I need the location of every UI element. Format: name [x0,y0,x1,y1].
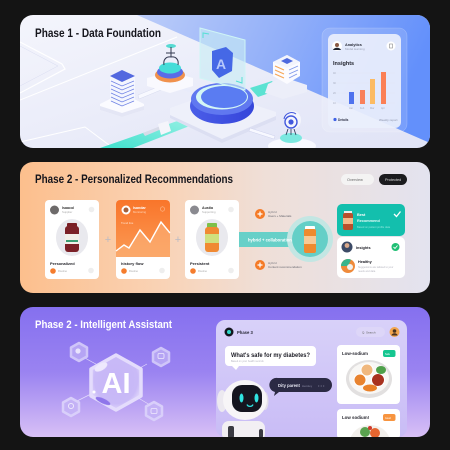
document block on platform [265,55,307,94]
satellite hexagon top left [71,343,87,361]
panel: phase 2 intelligent assistant [20,307,430,450]
card: history line chart: Isandar [133,206,146,210]
orange plus callout top: Hybrid [268,210,277,214]
assistant app window [216,320,407,450]
teal result card: Best [357,213,366,217]
bottom connector [249,128,275,139]
holographic screen with A cube [200,28,245,90]
connector: arm to hub [180,86,195,94]
robot assistant [217,380,268,441]
assistant dark bubble: Hensley [302,384,313,388]
food card low sodium [337,345,400,404]
plus sign: + [105,234,111,246]
search pill [356,327,385,337]
food card low sodium second: Low sodium! [342,415,370,420]
card: history line chart: Monitoring [133,210,147,214]
heading: phase 2 recommendations: Phase 2 - Personalized Recommendations [35,174,233,186]
card: personalised bottle: Supplier [62,210,72,214]
chart legend [333,118,398,122]
satellite hexagon bottom right [146,402,162,420]
connector: server to arm [138,88,161,99]
clipboard button [386,42,396,50]
teal result card: Based on patient profile data [357,225,391,229]
orange plus callout top: Users + Materials [268,214,292,218]
satellite hexagon top right [153,348,169,366]
food card low sodium: Safe [385,353,391,356]
panel: phase 2 personalized recommendations [20,162,430,293]
white result card: Insights [356,246,371,250]
food card low sodium: Low-sodium [342,351,368,356]
card: personalised bottle [45,200,99,279]
spiral icon on teal pedestal [268,111,316,148]
teal result card: Recommend [357,219,380,223]
orange plus callout bottom: Content recommendation [268,265,302,269]
white result card: Suggestions are tailored to your [358,266,393,269]
status pills [341,174,407,185]
bar chart [333,72,386,110]
assistant dark bubble: Dity parent [278,383,300,388]
teal result card [337,204,405,236]
app logo and name: Phase 3 [237,330,254,335]
teal hybrid band with bottle: hybrid + collaboration [248,238,292,242]
user chat bubble: Based on your health records [231,360,264,363]
bar chart: 40 [333,72,336,75]
satellite hexagon bottom left [63,398,79,416]
dashboard header text [345,44,364,50]
food card low sodium second [337,409,400,450]
teal link to document block [250,81,272,97]
food card low sodium second: Good [385,417,392,420]
dashboard header text: Model learning [345,47,365,51]
card: orange bottle: Austia [202,206,214,210]
dashboard title: Insights [333,61,354,67]
user avatar [390,327,400,337]
white result card [337,237,405,278]
search pill: Q. Search [362,330,376,334]
heading: intelligent assistant: Phase 2 - Intelligent Assistant [35,319,172,331]
teal pipe [100,121,188,148]
dashboard glass card [322,28,407,132]
AI hub network [63,343,169,420]
orange plus callout bottom [255,260,302,270]
card: orange bottle [185,200,239,279]
avatar [332,41,342,51]
holographic screen with A cube: A [216,56,226,72]
AI hexagon: AI [102,368,130,400]
user chat bubble: What's safe for my diabetes? [231,352,310,359]
card: history line chart [116,200,170,279]
card: personalised bottle: Personalized [50,261,75,266]
panel: phase 1 data foundation [20,15,430,154]
dashboard header text: Analytics [345,43,362,47]
bar chart: 30 [333,82,336,85]
card: orange bottle: Persistent [190,261,210,266]
card: history line chart: Routine [129,269,138,273]
status pills: Protected [385,178,401,182]
bar chart: Mar [370,107,374,110]
server stack on platform [100,70,144,117]
card: orange bottle: Supporting [202,210,216,214]
card: history line chart: Trend line [121,221,134,225]
bar chart: Feb [360,107,365,110]
chart legend: Details [338,118,349,122]
assistant dark bubble [269,378,332,396]
assistant dark bubble: • • • [318,383,325,388]
heading: phase 1: Phase 1 - Data Foundation [35,28,161,40]
card: history line chart: history flow [121,261,144,266]
user chat bubble [225,346,316,370]
orange plus callout bottom: Hybrid [268,261,277,265]
card: orange bottle: Routine [198,269,207,273]
bar chart: 20 [333,92,336,95]
status pills: Overview [347,178,363,182]
central hub platform [170,83,276,143]
plus sign: + [175,234,181,246]
robot arm on platform [147,44,193,93]
white result card: Healthy [358,260,373,264]
bar chart: 10 [333,102,336,105]
teal hybrid band with bottle [239,216,333,262]
app logo and name [224,328,254,336]
card: personalised bottle: Routine [58,269,67,273]
white result card: needs and data [358,270,376,273]
orange plus callout top [255,209,292,219]
bar chart: Jan [349,107,354,110]
card: personalised bottle: Isaacol [62,206,74,210]
bar chart: Apr [381,107,385,110]
chart legend: Weekly report [379,118,398,122]
